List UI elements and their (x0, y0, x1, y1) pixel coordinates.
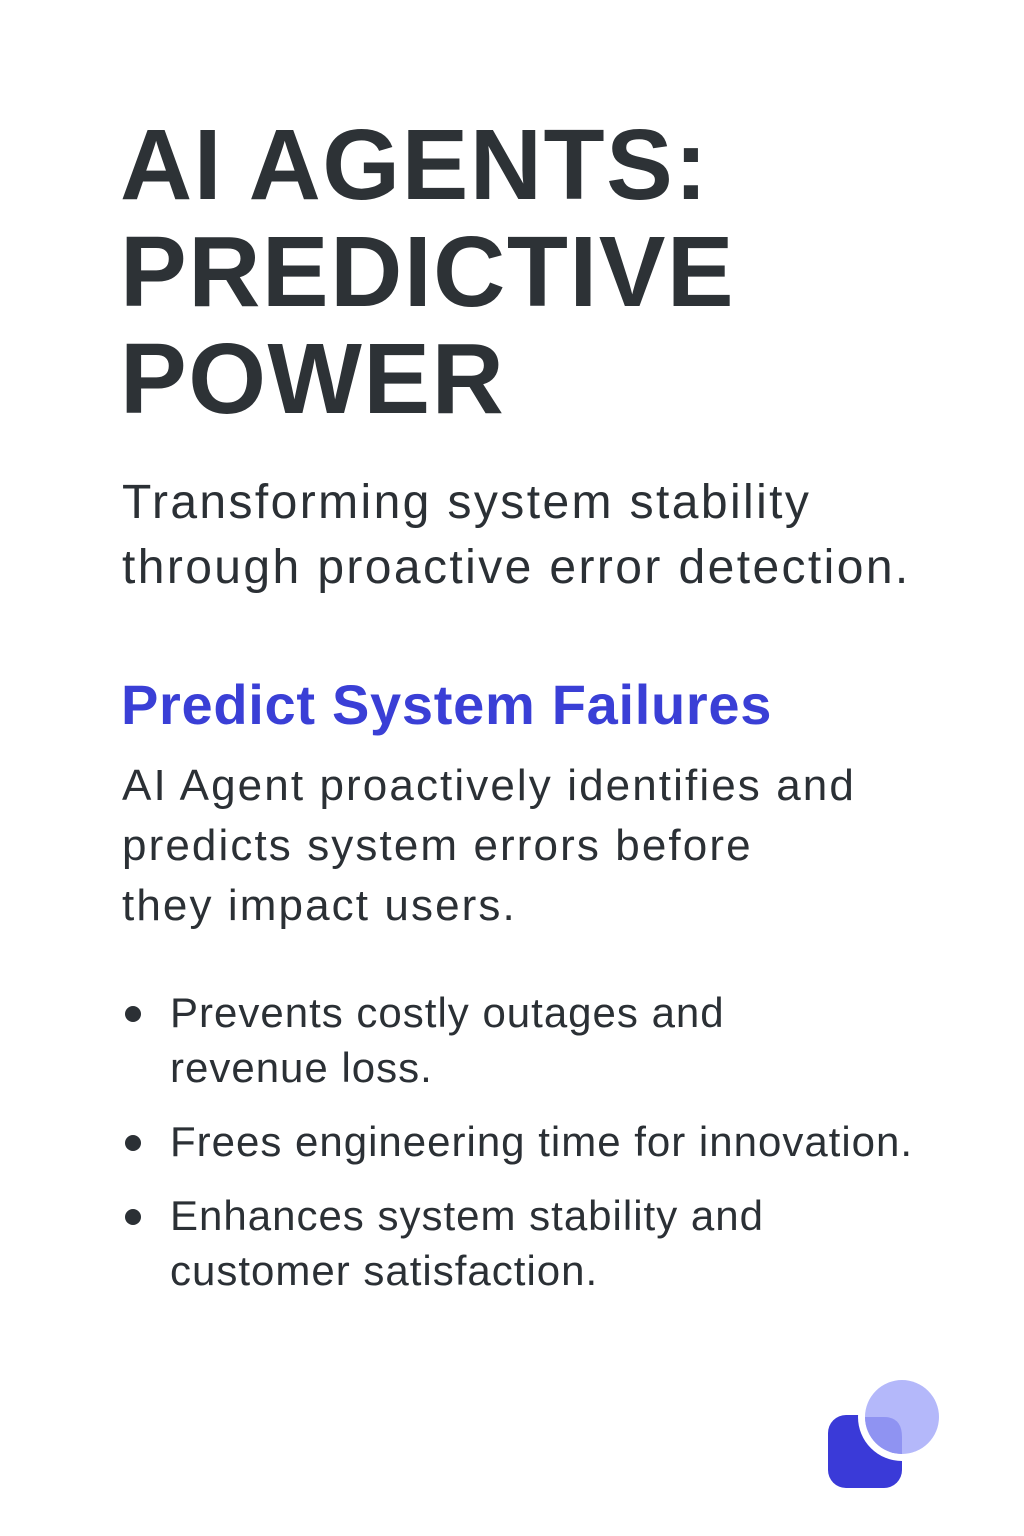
subtitle: through proactive error detection. (122, 541, 911, 594)
icon: logo (828, 1380, 939, 1488)
bullet 1: Prevents costly outages and (170, 989, 725, 1036)
bullet 3: Enhances system stability and (170, 1192, 764, 1239)
bullet 3 (125, 1192, 764, 1294)
subtitle (122, 476, 911, 594)
title: POWER (120, 323, 505, 435)
bullet 3: customer satisfaction. (170, 1247, 598, 1294)
title: PREDICTIVE (120, 216, 735, 328)
bullet list (125, 989, 913, 1294)
subtitle: Transforming system stability (122, 476, 811, 529)
title (120, 109, 735, 435)
body text: predicts system errors before (122, 821, 753, 870)
title: AI AGENTS: (120, 109, 709, 221)
body text: AI Agent proactively identifies and (122, 761, 856, 810)
body text: they impact users. (122, 881, 517, 930)
body text (122, 761, 856, 930)
section heading: Predict System Failures (121, 673, 772, 736)
bullet 1: revenue loss. (170, 1044, 433, 1091)
bullet 1 (125, 989, 725, 1091)
bullet 2: Frees engineering time for innovation. (170, 1118, 913, 1165)
